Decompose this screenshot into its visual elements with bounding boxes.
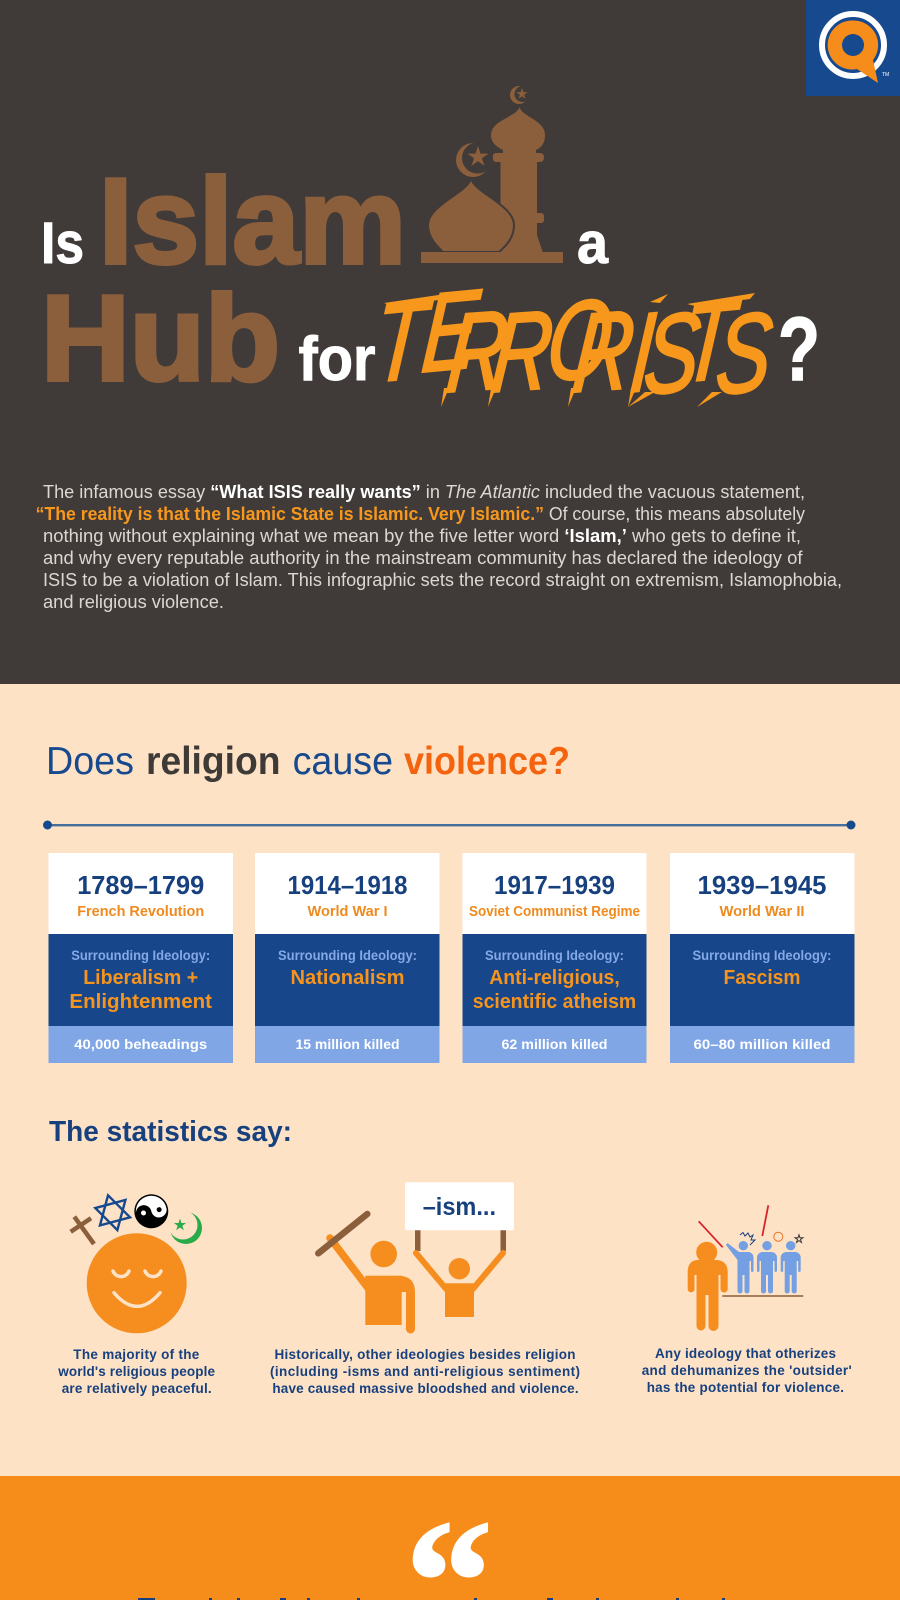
card: World War I: 1914–1918 <box>288 872 408 900</box>
card: World War II: World War II <box>720 904 804 920</box>
heading: Does <box>46 740 134 783</box>
sign: –ism... <box>423 1193 496 1221</box>
panel: orange quote band <box>0 1476 900 1600</box>
caption: otherizing: and dehumanizes the 'outsider' <box>642 1363 852 1378</box>
card: Soviet Communist Regime: 1917–1939 <box>494 872 615 900</box>
card: World War II: 1939–1945 <box>698 872 826 900</box>
card: French Revolution: Liberalism + <box>83 966 198 989</box>
title: for <box>298 325 376 394</box>
card: World War I: 15 million killed <box>296 1037 400 1052</box>
figure: accusing group <box>726 1241 801 1294</box>
card: World War II <box>670 853 854 1063</box>
card: Soviet Communist Regime: 62 million killed <box>502 1037 608 1052</box>
card: World War I <box>255 853 440 1063</box>
logo: TM <box>882 72 889 78</box>
intro paragraph: “The reality is that the Islamic State is Islamic. Very Islamic.” Of course, this means absolutely <box>36 504 805 524</box>
caption: otherizing <box>642 1346 852 1395</box>
brush drips <box>384 293 755 407</box>
card: World War I: Nationalism <box>290 966 404 989</box>
icon: peaceful face with religious symbols <box>71 1191 202 1333</box>
card: Soviet Communist Regime: Surrounding Ideology: <box>485 947 624 963</box>
card: Soviet Communist Regime <box>462 853 646 1063</box>
caption: ideologies: Historically, other ideologies besides religion <box>274 1347 576 1362</box>
intro paragraph: The infamous essay “What ISIS really wants” in The Atlantic included the vacuous statement, <box>43 482 805 502</box>
card: World War II: Fascism <box>724 966 800 989</box>
title <box>41 86 820 419</box>
card: Soviet Communist Regime: scientific atheism <box>473 990 636 1013</box>
card: World War II: 60–80 million killed <box>694 1037 830 1052</box>
subheading: statistics: The statistics say: <box>49 1116 292 1148</box>
icon: mosque <box>421 86 563 263</box>
card: French Revolution: 40,000 beheadings <box>74 1037 207 1052</box>
card: French Revolution: Enlightenment <box>69 990 212 1013</box>
heading: violence? <box>404 740 570 783</box>
title: Is <box>41 211 84 276</box>
caption: ideologies: (including -isms and anti-religious sentiment) <box>270 1364 580 1379</box>
title: ? <box>778 300 820 400</box>
icon: yin yang <box>131 1191 171 1231</box>
heading <box>46 740 570 783</box>
card: Soviet Communist Regime: Anti-religious, <box>489 966 620 989</box>
panel: does religion cause violence <box>0 684 900 1476</box>
ground line and pointing lines <box>699 1205 803 1296</box>
figure: person holding sign <box>416 1253 503 1317</box>
icon: star of david <box>93 1191 132 1234</box>
title: Hub <box>41 270 280 406</box>
card: French Revolution: Surrounding Ideology: <box>71 947 210 963</box>
intro paragraph: nothing without explaining what we mean by the five letter word ‘Islam,’ who gets to define it, <box>43 526 801 546</box>
intro paragraph <box>36 482 842 612</box>
heading: religion <box>146 740 280 783</box>
timeline rule <box>43 820 856 830</box>
panel: dark header <box>0 0 900 684</box>
intro paragraph: and religious violence. <box>43 592 224 612</box>
caption: peaceful: The majority of the <box>73 1347 200 1362</box>
caption: peaceful: are relatively peaceful. <box>62 1381 212 1396</box>
icon: protesters <box>318 1182 514 1334</box>
caption: peaceful: world's religious people <box>57 1364 215 1379</box>
card: French Revolution: 1789–1799 <box>77 872 204 900</box>
card: French Revolution: French Revolution <box>77 904 204 920</box>
caption: ideologies <box>270 1347 580 1396</box>
card: French Revolution <box>48 853 233 1063</box>
icon: outsider and accusing group <box>688 1205 803 1331</box>
caption: peaceful <box>57 1347 215 1396</box>
icon: cross <box>71 1217 94 1244</box>
card: World War II: Surrounding Ideology: <box>692 947 832 963</box>
heading: cause <box>293 740 393 783</box>
figure: outsider <box>688 1242 728 1331</box>
card: World War I: Surrounding Ideology: <box>278 947 417 963</box>
title: Islam <box>99 153 406 289</box>
clipped tops of the next line at the page edge <box>138 1598 725 1600</box>
caption: otherizing: Any ideology that otherizes <box>655 1346 836 1361</box>
intro paragraph: ISIS to be a violation of Islam. This infographic sets the record straight on extremism, Islamophobia, <box>43 570 842 590</box>
caption: ideologies: have caused massive bloodshed and violence. <box>272 1381 579 1396</box>
figure: person with raised baton <box>318 1214 415 1334</box>
sign <box>405 1182 514 1251</box>
icon: crescent and star <box>168 1210 202 1244</box>
card: World War I: World War I <box>308 904 388 920</box>
caption: otherizing: has the potential for violence. <box>647 1380 844 1395</box>
intro paragraph: and why every reputable authority in the mainstream community has declared the ideology of <box>43 548 804 568</box>
brush word: terrorists: TERRORISTS <box>362 265 787 419</box>
title: a <box>577 211 609 276</box>
logo <box>806 0 900 96</box>
card: Soviet Communist Regime: Soviet Communist Regime <box>469 904 640 920</box>
